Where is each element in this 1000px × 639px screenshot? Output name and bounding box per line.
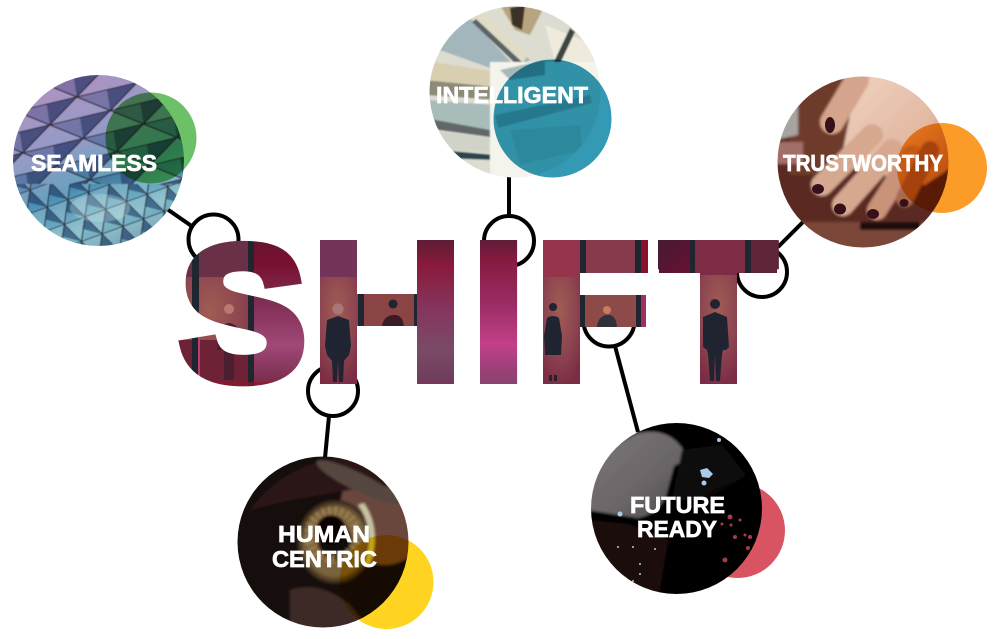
photo circle: seamless	[10, 72, 190, 250]
accent circle: orange	[897, 123, 987, 213]
label: HUMAN CENTRIC: HUMAN	[278, 521, 370, 547]
accent circle: red	[690, 483, 785, 578]
photo: S section	[178, 240, 304, 386]
photo: T section	[655, 235, 781, 387]
photo circle: intelligent	[430, 6, 600, 178]
label: HUMAN CENTRIC: CENTRIC	[272, 546, 377, 572]
accent circle: green	[106, 92, 196, 184]
sparkles: red particles	[720, 514, 752, 562]
accent circle: teal	[494, 60, 612, 178]
photo: F section	[540, 235, 650, 387]
figure: mannequin in H stem	[325, 304, 351, 382]
connector: future ready ring and line	[584, 321, 638, 432]
label: HUMAN CENTRIC	[272, 521, 377, 572]
label: SEAMLESS: SEAMLESS	[31, 150, 157, 176]
figure: bust in H crossbar	[382, 300, 404, 327]
label: FUTURE READY	[630, 492, 725, 542]
connector: intelligent ring and line	[484, 175, 534, 266]
connector: seamless ring and line	[167, 209, 238, 264]
photo: I section	[480, 240, 518, 384]
label: FUTURE READY: READY	[637, 516, 717, 542]
photo circle: trustworthy	[775, 75, 955, 252]
connector: human centric ring and line	[308, 366, 358, 458]
figure: woman in F stem	[544, 303, 562, 381]
photo circle: human centric	[238, 456, 408, 628]
label: FUTURE READY: FUTURE	[630, 492, 725, 518]
label: TRUSTWORTHY: TRUSTWORTHY	[783, 150, 943, 176]
photo circle: future ready	[588, 420, 768, 600]
label: INTELLIGENT: INTELLIGENT	[436, 82, 588, 108]
figure: man in T stem	[703, 299, 729, 381]
photo: H section	[320, 240, 454, 384]
connector: trustworthy ring and line	[737, 222, 803, 297]
title: SHIFT letters filled with photo	[178, 240, 779, 386]
figure: bust in F crossbar	[597, 306, 617, 327]
accent circle: yellow	[340, 535, 434, 629]
